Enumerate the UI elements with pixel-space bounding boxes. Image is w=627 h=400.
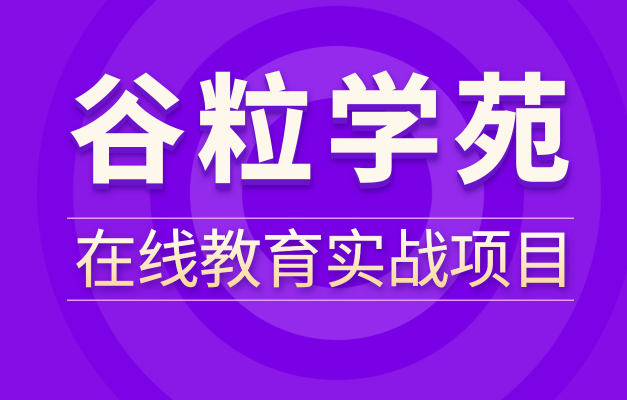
title: 谷粒学苑 (69, 66, 571, 197)
top divider (67, 218, 574, 219)
bottom divider (67, 300, 574, 301)
subtitle: 在线教育实战项目 (74, 226, 574, 296)
